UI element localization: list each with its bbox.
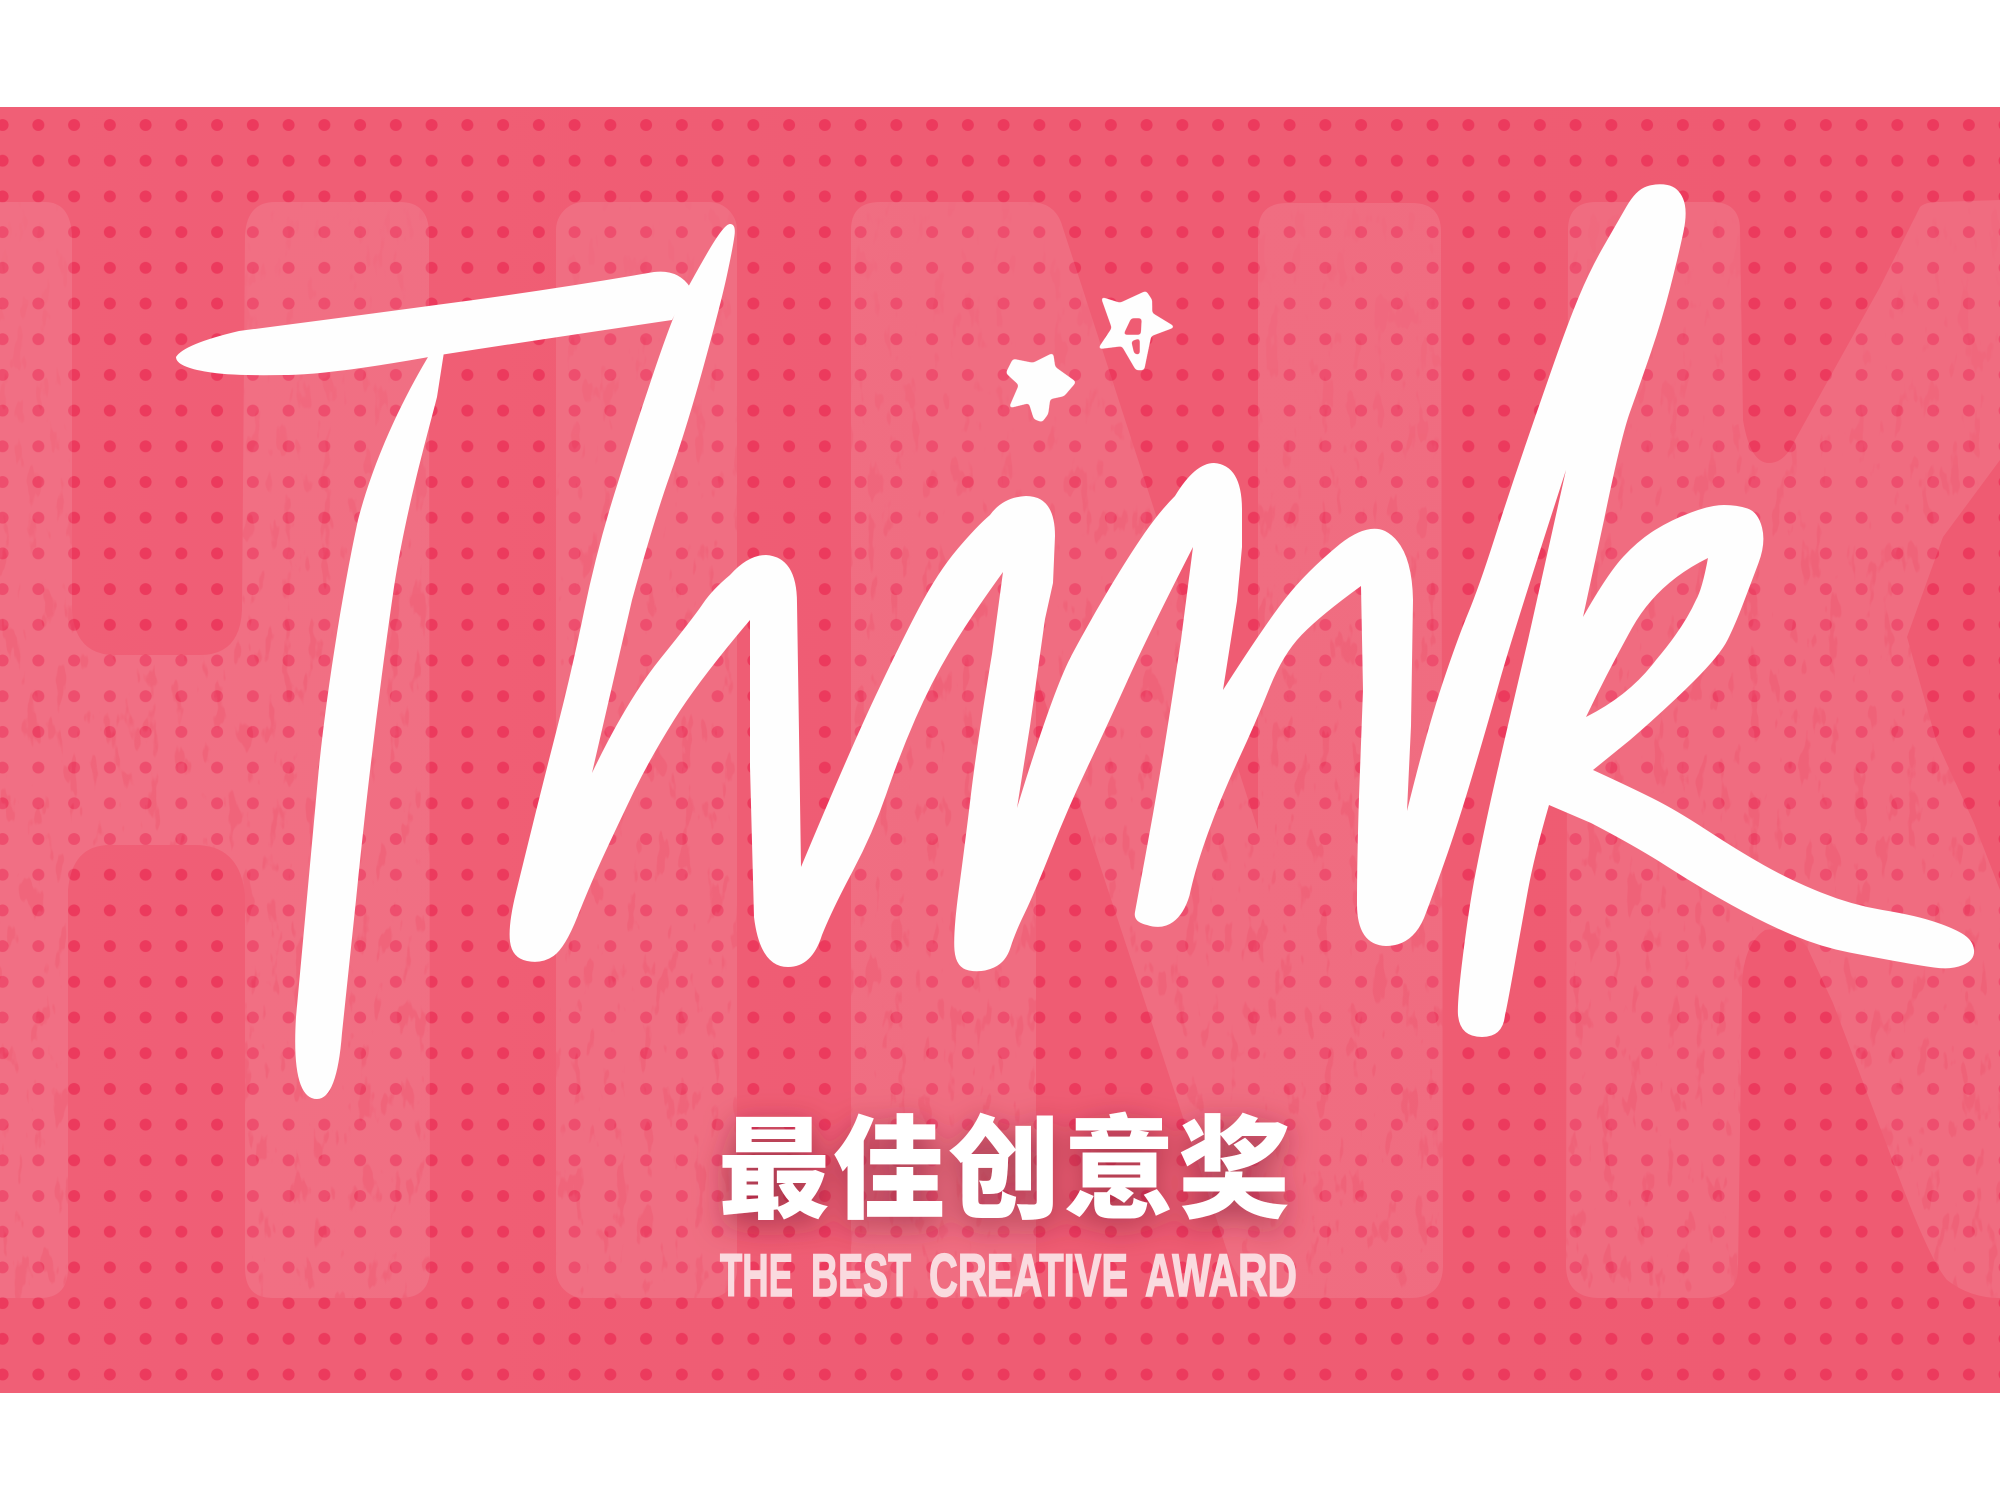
ghost letter K	[1566, 200, 2000, 1298]
icon: upper star	[1098, 291, 1175, 370]
subtitle: English award name: CREATIVE	[929, 1242, 1128, 1309]
icon: two small stars	[1006, 291, 1175, 422]
title shadow: 最佳创意奖	[718, 1108, 1290, 1233]
background ghost letters HINK	[0, 200, 2000, 1298]
subtitle: English award name: BEST	[811, 1242, 911, 1309]
h-i-n-k connected strokes	[510, 184, 1974, 1037]
title: Chinese award name: 最佳创意奖	[718, 1108, 1290, 1233]
subtitle: English award name: THE	[720, 1242, 793, 1309]
ghost letter N	[851, 202, 1443, 1298]
ghost letter H	[0, 202, 430, 1298]
T stem	[295, 352, 444, 1099]
subtitle: English award name	[720, 1242, 1297, 1309]
handwritten word Think	[176, 184, 1974, 1099]
T crossbar	[176, 272, 690, 375]
ghost letter I	[556, 202, 737, 1298]
icon: lower star	[1006, 353, 1076, 422]
subtitle: English award name: AWARD	[1145, 1242, 1297, 1309]
